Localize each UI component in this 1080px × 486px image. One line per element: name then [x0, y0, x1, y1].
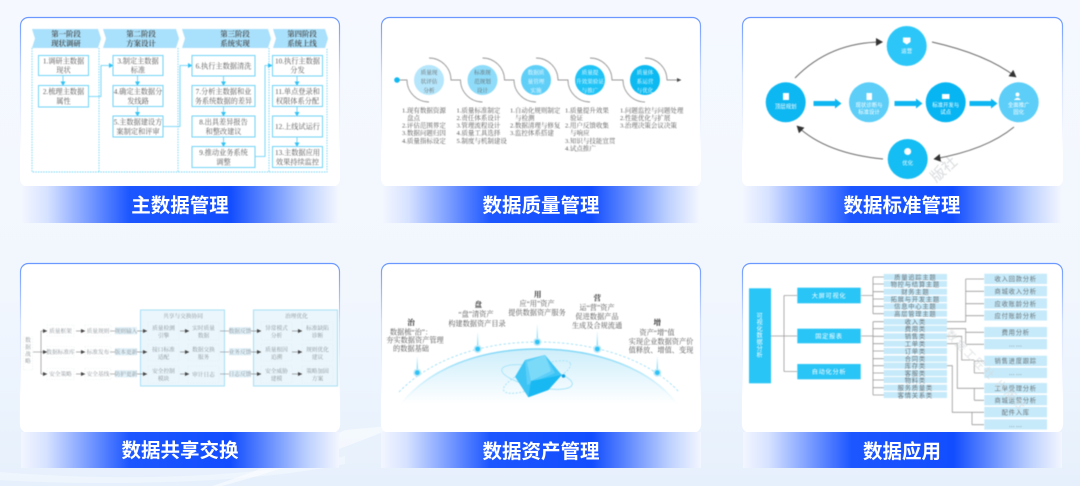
watermark: 数据工匠社 出版社	[943, 327, 1030, 414]
milestone markers	[413, 324, 661, 377]
captions	[386, 290, 693, 354]
labels: 模块	[158, 374, 169, 382]
step boxes: 10.执行主数据	[275, 56, 320, 66]
labels: 安全威胁	[265, 367, 288, 375]
stage headers: 第四阶段	[287, 30, 317, 38]
level four analyses: ……	[1009, 422, 1023, 429]
task lists: 5.制度与机制建设	[456, 136, 507, 145]
step boxes: 权限体系分配	[276, 96, 319, 106]
task lists: 验证	[570, 113, 584, 122]
panel: 主数据管理	[20, 18, 340, 223]
labels: 安全控制	[152, 367, 175, 375]
labels: 数据交换	[192, 346, 215, 354]
captions: 运“营”资产	[579, 303, 615, 312]
stage circles: 质量体	[637, 68, 654, 76]
node: 现状诊断与标准设计: 标准设计	[858, 108, 880, 116]
labels: 业务反馈	[229, 348, 252, 356]
banner: 数据共享交换	[21, 432, 339, 468]
task lists: 2.用户反馈收集	[565, 120, 609, 130]
task lists: 4.质量指标设定	[402, 136, 446, 145]
labels: 治理优化	[285, 312, 308, 320]
task lists: 2.数据清理与修复	[510, 120, 561, 130]
captions: 数据梳“治”：	[390, 328, 432, 336]
labels: 实时质量	[192, 324, 215, 332]
task lists: 与检测	[515, 113, 535, 122]
captions: 增	[654, 317, 662, 327]
task lists: 3.知识与技能宣贯	[565, 136, 616, 145]
labels: 建议	[312, 353, 323, 361]
root and level two nodes: 化	[757, 325, 763, 333]
banner: 数据质量管理: 数据质量管理	[482, 194, 600, 217]
labels: 策略加固	[306, 367, 329, 375]
labels: 引擎	[158, 332, 169, 340]
level three topics: 库存类	[905, 361, 926, 370]
stage circles: 数据质	[528, 68, 545, 76]
task lists: 1.现有数据资源	[402, 106, 446, 114]
banner: 数据共享交换: 数据共享交换	[121, 439, 239, 462]
labels: 数	[25, 336, 31, 344]
labels: 数据	[198, 332, 209, 340]
root and level two nodes: 可	[757, 313, 763, 320]
stage circles: 实施	[530, 86, 542, 94]
level three topics: 合同类	[905, 354, 926, 363]
level three topics: 物控与结算主题	[891, 280, 940, 288]
step boxes: 2.梳理主数据	[43, 87, 84, 96]
labels	[25, 312, 329, 382]
task lists: 1.质量标准制定	[456, 106, 501, 114]
labels: 质量框架	[49, 327, 72, 335]
banner: 数据应用: 数据应用	[863, 440, 941, 463]
step boxes: 3.制定主数据	[117, 56, 159, 66]
dome	[401, 349, 677, 404]
connectors	[63, 66, 297, 156]
root and level two nodes: 据	[757, 338, 763, 346]
captions: 促进数据产品	[575, 312, 619, 321]
level three topics: 收入类	[905, 317, 926, 326]
stage circles: 质量现	[421, 68, 438, 76]
node: 优化: 优化	[902, 159, 914, 167]
node: 顶层规划: 顶层规划	[775, 102, 796, 110]
level three topics: 信息中心主题	[894, 302, 936, 310]
task lists: 3.管理流程设计	[456, 120, 501, 130]
banner: 数据标准管理: 数据标准管理	[843, 194, 961, 217]
labels: 适配	[158, 353, 169, 361]
level three topics: 高层管理主题	[894, 309, 936, 318]
root and level two nodes: 自动化分析	[812, 368, 846, 376]
task lists: 与响应	[570, 128, 590, 137]
banner: 数据应用	[743, 432, 1062, 468]
level four analyses: 配件入库	[1002, 408, 1030, 416]
step boxes: 11.单点登录和	[275, 87, 320, 96]
task lists: 2.责任体系设计	[456, 113, 501, 122]
stage circles: 设计	[477, 86, 488, 94]
node: 全面推广固化: 全面推广	[1008, 101, 1030, 109]
captions: “盘”清资产	[458, 310, 494, 318]
level four analyses	[984, 274, 1047, 430]
labels: 异常模式	[265, 324, 288, 332]
arrows	[33, 331, 302, 374]
stage headers: 现状调研	[51, 39, 81, 48]
stage circles: 状评估	[421, 78, 438, 86]
step boxes: 5.主数据建设方	[114, 118, 162, 126]
node: 运营	[887, 26, 927, 66]
task lists: 2.评估范围界定	[402, 120, 446, 130]
labels: 安全策略	[49, 370, 72, 378]
flow chart	[24, 310, 338, 386]
level four analyses: 商城运营分析	[995, 396, 1037, 404]
labels: 标准缺陷	[306, 324, 329, 332]
tree diagram	[749, 272, 1047, 430]
level three topics: 物料类	[905, 376, 926, 384]
task lists: 3.监控体系搭建	[510, 128, 554, 137]
root and level two nodes: 分	[757, 344, 763, 352]
level three topics: 工单类	[905, 339, 926, 348]
captions: 的数据基础	[393, 344, 429, 353]
node: 标准开发与试点: 试点	[940, 108, 952, 116]
process: five stage wave	[394, 58, 684, 152]
task lists: 1.质量提升效果	[565, 106, 609, 114]
root and level two nodes	[749, 288, 861, 383]
labels: 诊断	[312, 332, 323, 340]
panel: 数据共享交换	[20, 264, 340, 468]
node: 运营: 运营	[901, 47, 913, 55]
task lists: 1.问题监控与问题处理	[620, 106, 684, 114]
task lists: 1.自动化规则制定	[510, 106, 561, 114]
labels: 据	[25, 343, 31, 351]
block arrows	[814, 98, 998, 108]
group boxes	[115, 310, 338, 386]
step boxes: 案制定和评审	[116, 127, 160, 136]
cycle diagram	[766, 26, 1039, 186]
labels: 服务	[198, 353, 209, 361]
root and level two nodes: 视	[757, 318, 763, 326]
captions: 资产“增”值	[639, 328, 675, 337]
labels: 战	[25, 350, 31, 358]
root and level two nodes: 大屏可视化	[812, 292, 846, 300]
captions: 提供数据资产服务	[508, 308, 566, 317]
task lists: 3.数据问题归因	[402, 128, 446, 137]
stage headers: 第二阶段	[126, 30, 156, 38]
root and level two nodes: 析	[757, 351, 763, 359]
root and level two nodes: 数	[757, 332, 764, 340]
captions: 生成及合规流通	[572, 321, 622, 330]
captions: 夯实数据资产管理	[386, 336, 445, 344]
step boxes: 8.出具差异报告	[199, 118, 248, 126]
stage circles: 与推广	[582, 86, 599, 94]
step boxes: 标准	[131, 66, 145, 74]
root and level two nodes: 固定报表	[815, 332, 843, 340]
captions: 盘	[475, 299, 483, 309]
stage circles	[414, 65, 660, 95]
node: 全面推广固化: 固化	[1013, 108, 1025, 116]
stage headers: 第三阶段	[220, 30, 250, 38]
node: 现状诊断与标准设计: 现状诊断与	[856, 101, 882, 109]
level three topics: 财务主题	[901, 287, 929, 296]
cycle arrows	[795, 42, 1016, 159]
labels: 版本更新	[115, 348, 138, 356]
step boxes: 属性	[56, 96, 71, 106]
level three topics: 服务质量类	[898, 383, 933, 392]
step boxes: 12.上线试运行	[275, 122, 320, 131]
panel: 数据应用	[742, 264, 1062, 468]
banner: 主数据管理	[22, 186, 338, 223]
banner: 数据质量管理	[383, 186, 699, 223]
labels: 规则输入	[115, 327, 138, 335]
banner: 主数据管理: 主数据管理	[131, 194, 229, 217]
labels: 建模	[271, 374, 282, 382]
labels: 质量规则	[87, 327, 110, 335]
level three topics	[884, 272, 947, 400]
stage circles: 分析	[423, 86, 435, 94]
level three topics: 拓展与开发主题	[891, 294, 940, 304]
step boxes: 6.执行主数据清洗	[196, 62, 251, 70]
captions: 值释放、增值、变现	[629, 346, 693, 354]
stage circles: 系运营	[637, 78, 654, 86]
tree connectors	[771, 277, 984, 425]
captions: 应“用”资产	[519, 299, 555, 308]
step boxes: 调整	[216, 158, 231, 166]
task lists: 4.试点推广	[565, 144, 596, 152]
level three topics: 客情关系类	[898, 390, 933, 400]
task lists	[402, 106, 684, 152]
labels: 审计日志	[192, 370, 215, 378]
step boxes: 效果持续监控	[276, 158, 319, 166]
panel: 数据质量管理	[382, 18, 700, 223]
node: 标准开发与试点	[926, 82, 966, 122]
level three topics: 质量追踪主题	[894, 272, 936, 282]
step boxes: 4.确定主数据分	[114, 87, 162, 96]
banner: 数据资产管理	[381, 432, 701, 468]
labels: 数据反馈	[229, 327, 252, 335]
labels: 数据标准库	[46, 348, 75, 356]
node: 标准开发与试点: 标准开发与	[932, 101, 959, 109]
step boxes: 分发	[290, 66, 305, 74]
step boxes: 发线路	[127, 96, 149, 106]
step boxes: 9.推动业务系统	[199, 148, 249, 157]
step boxes: 1.调研主数据	[43, 56, 84, 66]
node: 全面推广固化	[999, 82, 1039, 122]
node: 顶层规划	[766, 82, 806, 122]
level three topics: 客服类	[905, 368, 926, 378]
node: 优化	[888, 139, 928, 179]
level four analyses: 应付账龄分析	[995, 311, 1037, 320]
node: 现状诊断与标准设计	[849, 82, 889, 122]
step boxes: 现状	[56, 66, 71, 74]
step boxes	[38, 56, 322, 168]
captions: 构建数据资产目录	[448, 319, 506, 328]
labels: 防护更新	[115, 370, 138, 378]
captions: 治	[407, 317, 416, 327]
level four analyses: 商城收入分析	[995, 286, 1037, 296]
labels: 规则优化	[306, 346, 329, 354]
task lists: 2.性能优化与扩展	[620, 113, 671, 122]
panel: 数据标准管理	[742, 18, 1062, 223]
step boxes: 务系统数据的差异	[195, 96, 252, 106]
stage circles: 量管理	[528, 78, 545, 86]
captions: 用	[534, 290, 541, 299]
labels: 共享与交换协同	[163, 312, 203, 320]
level four analyses: 费用分析	[1002, 328, 1030, 336]
stage circles: 标准规	[474, 68, 491, 76]
watermark: 版社	[927, 153, 961, 186]
stage headers: 系统上线	[287, 39, 317, 48]
level four analyses: ……	[1009, 342, 1023, 348]
stage headers: 系统实现	[220, 39, 250, 48]
labels: 安全基线	[87, 370, 110, 378]
labels: 日志反馈	[229, 370, 252, 378]
labels: 分析	[271, 332, 282, 340]
level three topics: 销售类	[905, 332, 926, 340]
captions: 营	[594, 292, 602, 302]
step boxes: 7.分析主数据和业	[196, 87, 251, 96]
stage circles: 范规划	[474, 78, 491, 86]
flow chart: four stages	[32, 29, 328, 172]
level four analyses: ……	[1009, 370, 1023, 377]
dome diagram	[386, 290, 693, 404]
labels: 标准发布	[87, 348, 110, 356]
labels: 质量根因	[265, 346, 288, 354]
labels: 追溯	[271, 353, 282, 361]
labels: 方案	[312, 374, 323, 382]
level three topics: 费用类	[905, 324, 926, 333]
step boxes: 和整改建议	[206, 127, 241, 136]
banner: 数据标准管理	[743, 186, 1061, 223]
task lists: 3.治理决策会议决策	[620, 120, 677, 130]
stage headers	[32, 29, 328, 48]
stage circles: 与优化	[637, 86, 654, 94]
stage headers: 第一阶段	[51, 30, 81, 38]
level four analyses: 应收账龄分析	[995, 299, 1037, 308]
level three topics: 订单类	[905, 346, 926, 356]
level four analyses: 收入回款分析	[995, 274, 1037, 283]
stage headers: 方案设计	[126, 39, 156, 48]
banner: 数据资产管理: 数据资产管理	[482, 440, 600, 463]
stage circles: 升效果验证	[576, 78, 604, 86]
stage circles: 质量提	[582, 68, 599, 76]
panel: 数据资产管理	[381, 264, 701, 468]
captions: 实现企业数据资产价	[629, 337, 693, 346]
step boxes: 13.主数据应用	[275, 148, 320, 157]
labels: 略	[25, 357, 31, 365]
polyhedron with orbits	[500, 354, 574, 400]
level four analyses: 工单受理分析	[995, 384, 1037, 392]
task lists: 盘点	[407, 113, 420, 122]
dotted nodes	[24, 322, 333, 383]
labels: 质量检测	[152, 324, 175, 332]
level four analyses: 销售进度跟踪	[995, 356, 1037, 365]
labels: 接口标准	[152, 346, 175, 354]
task lists: 4.质量工具选择	[456, 128, 501, 137]
